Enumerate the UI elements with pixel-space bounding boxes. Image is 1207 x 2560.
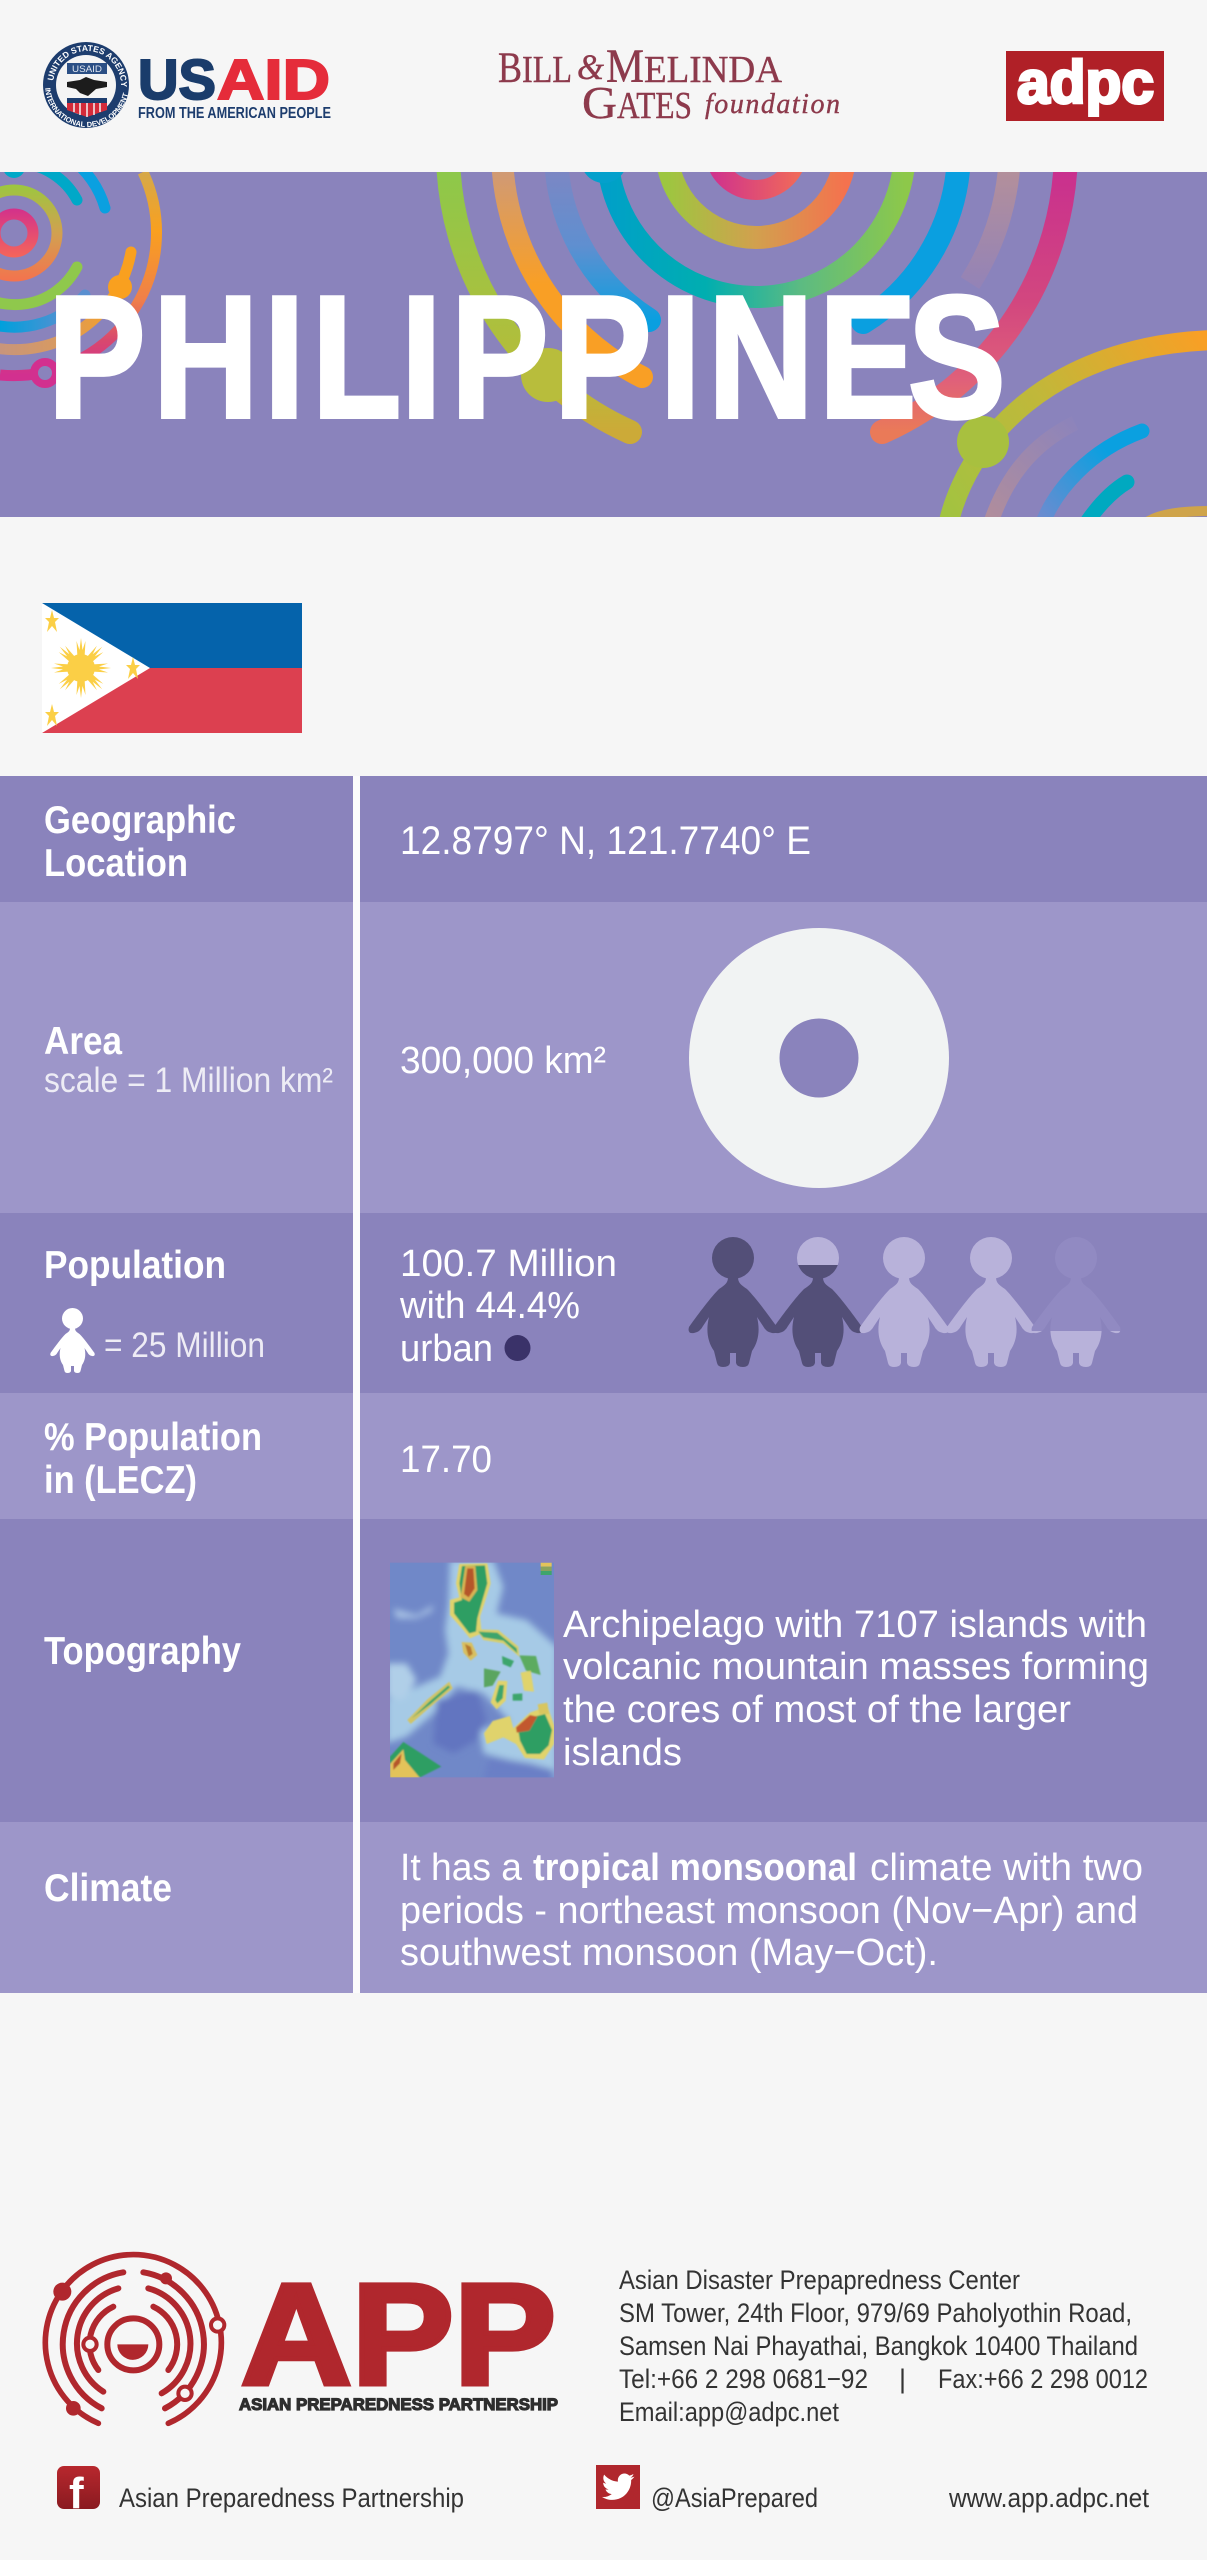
text: contact address: | <box>899 2364 906 2394</box>
row: topography <box>44 1560 1149 1780</box>
panel: data table <box>0 776 1207 1993</box>
row: population: 100.7 Million <box>400 1243 617 1285</box>
row: population in LECZ: % Population <box>44 1416 262 1459</box>
text: contact address: Fax:+66 2 298 0012 <box>938 2364 1148 2394</box>
logo: USAID: AID <box>217 48 330 112</box>
logo: USAID: US <box>138 48 216 112</box>
row: climate: It has a <box>400 1847 523 1889</box>
row: topography: volcanic mountain masses forming <box>563 1646 1149 1688</box>
logo: USAID: FROM THE AMERICAN PEOPLE <box>138 105 331 122</box>
logo: Bill & Melinda Gates Foundation: ILL <box>522 49 572 91</box>
row: geographic location: Geographic <box>44 799 236 842</box>
title: PHILIPPINES <box>48 261 1006 455</box>
logo: USAID <box>43 42 331 128</box>
icon: flag of the Philippines <box>42 603 302 733</box>
map: topographic map <box>387 1560 557 1780</box>
row: population: urban <box>400 1328 493 1370</box>
logo: Bill & Melinda Gates Foundation: ATES <box>617 85 692 127</box>
logo: Bill & Melinda Gates Foundation: foundation <box>705 89 840 120</box>
text: website: www.app.adpc.net <box>948 2483 1149 2513</box>
icon: twitter <box>596 2465 640 2509</box>
icon: urban dot <box>504 1335 530 1361</box>
logo: APP wordmark: APP <box>241 2254 556 2415</box>
logo: Bill & Melinda Gates Foundation: ELINDA <box>644 49 783 91</box>
row: geographic location: 12.8797° N, 121.7740° E <box>400 819 811 863</box>
row: area: scale = 1 Million km² <box>44 1061 333 1100</box>
text: contact address <box>619 2265 1148 2427</box>
logo: Bill & Melinda Gates Foundation <box>498 40 840 128</box>
row: climate: climate with two <box>870 1847 1143 1889</box>
row: geographic location <box>44 799 811 885</box>
chart: area circles <box>689 928 949 1188</box>
logo: Bill & Melinda Gates Foundation: & <box>577 47 604 87</box>
logo: USAID: USAID <box>72 64 103 74</box>
icon: facebook <box>57 2466 100 2518</box>
text: contact address: Asian Disaster Prepapredness Center <box>619 2265 1020 2295</box>
banner <box>0 172 1207 517</box>
row: climate: Climate <box>44 1867 172 1910</box>
logo: APP emblem <box>45 2255 224 2423</box>
logo: Bill & Melinda Gates Foundation: G <box>582 78 617 128</box>
text: contact address: Samsen Nai Phayathai, Bangkok 10400 Thailand <box>619 2331 1138 2361</box>
banner decorative rings <box>0 172 1207 517</box>
row: population: Population <box>44 1244 226 1287</box>
chart: population figures <box>689 1237 1120 1367</box>
row: area <box>44 928 949 1188</box>
text: contact address: Email:app@adpc.net <box>619 2397 839 2427</box>
row: population in LECZ <box>44 1416 492 1502</box>
row: topography: Topography <box>44 1630 241 1673</box>
row: climate <box>44 1847 1143 1974</box>
row: area: 300,000 km² <box>400 1040 606 1082</box>
text: twitter handle: @AsiaPrepared <box>651 2483 818 2513</box>
text: contact address: SM Tower, 24th Floor, 979/69 Paholyothin Road, <box>619 2298 1132 2328</box>
row: climate: periods - northeast monsoon (Nov−Apr) and <box>400 1890 1138 1932</box>
logo: USAID: INTERNATIONAL DEVELOPMENT <box>45 88 128 128</box>
row: population in LECZ: 17.70 <box>400 1439 492 1481</box>
row: population in LECZ: in (LECZ) <box>44 1459 197 1502</box>
text: contact address: Tel:+66 2 298 0681−92 <box>619 2364 868 2394</box>
logo: Bill & Melinda Gates Foundation: M <box>606 40 644 93</box>
row: climate: tropical monsoonal <box>533 1847 857 1889</box>
row: climate: southwest monsoon (May−Oct). <box>400 1932 938 1974</box>
row: area: Area <box>44 1020 122 1063</box>
icon: facebook: f <box>69 2469 84 2518</box>
row: topography: Archipelago with 7107 islands with <box>563 1604 1147 1646</box>
row: population <box>44 1237 1120 1373</box>
logo: USAID: UNITED STATES AGENCY <box>48 45 127 87</box>
row: topography: the cores of most of the larger <box>563 1689 1071 1731</box>
logo: adpc: adpc <box>1017 49 1154 116</box>
logo: Bill & Melinda Gates Foundation: B <box>498 45 522 92</box>
row: population: = 25 Million <box>104 1326 265 1365</box>
row: topography: islands <box>563 1732 682 1774</box>
row: geographic location: Location <box>44 842 188 885</box>
row: population: with 44.4% <box>399 1285 580 1327</box>
logo: APP wordmark: ASIAN PREPAREDNESS PARTNERSHIP <box>239 2395 558 2414</box>
icon: person scale <box>50 1308 95 1373</box>
text: facebook name: Asian Preparedness Partnership <box>119 2483 464 2513</box>
